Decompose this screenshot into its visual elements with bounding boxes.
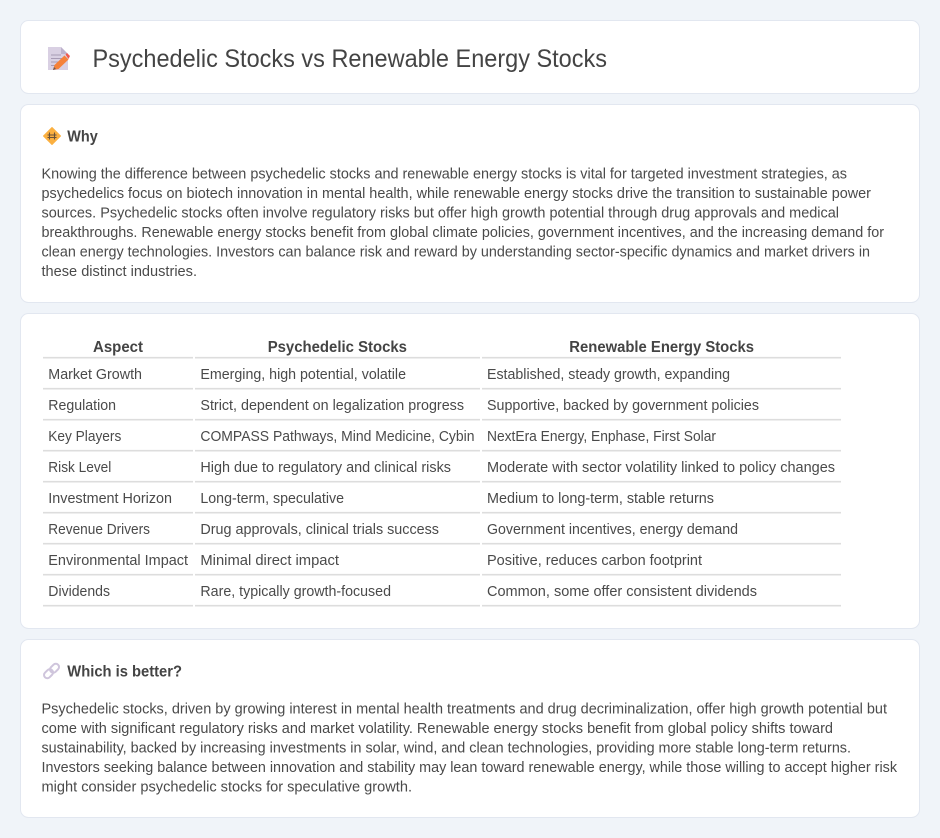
table header row: Aspect (93, 339, 144, 356)
table row: environmental impact: Minimal direct impact (200, 553, 339, 569)
text block: which is better paragraph: come with significant regulatory risks and market volatility. Renewable energy stocks benefit from global policy shifts toward (42, 721, 833, 737)
panel: which is better (20, 640, 920, 818)
text block: why paragraph: psychedelics focus on biotech innovation in mental health, while renewable energy stocks drive the transition to sustainable power (42, 186, 871, 202)
table row: market growth (43, 367, 841, 389)
icon: diamond sign (44, 128, 60, 144)
text block: which is better paragraph: might consider psychedelic stocks for speculative growth. (42, 780, 412, 796)
table row: key players: COMPASS Pathways, Mind Medicine, Cybin (200, 429, 474, 445)
text block: which is better paragraph: sustainability, backed by increasing investments in solar, wind, and clean technologies, providing more stable long-term returns. (42, 740, 851, 756)
text block: which is better paragraph (42, 702, 898, 796)
heading: why: Why (67, 129, 98, 146)
table row: investment horizon: Investment Horizon (48, 491, 172, 507)
table row: dividends: Rare, typically growth-focused (200, 584, 391, 600)
text block: why paragraph: these distinct industries. (42, 264, 197, 280)
table header row (43, 339, 841, 358)
table row: investment horizon: Medium to long-term, stable returns (487, 491, 714, 507)
table row: risk level: Risk Level (48, 460, 111, 476)
table row: dividends: Common, some offer consistent dividends (487, 584, 757, 600)
table row: investment horizon: Long-term, speculative (200, 491, 344, 507)
panel: why (20, 104, 920, 302)
table row: environmental impact (43, 553, 841, 575)
title: Psychedelic Stocks vs Renewable Energy Stocks (92, 45, 607, 73)
text block: why paragraph: breakthroughs. Renewable energy stocks benefit from global climate policies, government incentives, and the increasing demand for (42, 225, 884, 241)
table row: revenue drivers: Government incentives, energy demand (487, 522, 738, 538)
icon: document with pencil (48, 47, 70, 70)
table header row: Renewable Energy Stocks (569, 339, 754, 356)
table row: regulation: Supportive, backed by government policies (487, 398, 759, 414)
table row: dividends: Dividends (48, 584, 110, 600)
table row: revenue drivers: Drug approvals, clinical trials success (200, 522, 439, 538)
table row: regulation: Strict, dependent on legalization progress (200, 398, 464, 414)
table row: market growth: Market Growth (48, 367, 142, 383)
panel: comparison table (20, 314, 920, 628)
text block: why paragraph: Knowing the difference between psychedelic stocks and renewable energy stocks is vital for targeted investment strategies, as (42, 166, 847, 182)
heading: which is better: Which is better? (67, 664, 182, 681)
table row: environmental impact: Environmental Impact (48, 553, 188, 569)
table row: market growth: Emerging, high potential, volatile (200, 367, 406, 383)
table row: investment horizon (43, 491, 841, 513)
table row: key players: Key Players (48, 429, 121, 445)
text block: which is better paragraph: Investors seeking balance between innovation and stability may lean toward renewable energy, while those willing to accept higher risk (42, 760, 898, 776)
table header row: Psychedelic Stocks (268, 339, 407, 356)
table row: risk level (43, 460, 841, 482)
table row: market growth: Established, steady growth, expanding (487, 367, 730, 383)
text block: why paragraph (42, 166, 884, 280)
table row: revenue drivers: Revenue Drivers (48, 522, 150, 538)
table row: revenue drivers (43, 522, 841, 544)
table row: risk level: Moderate with sector volatility linked to policy changes (487, 460, 835, 476)
table row: regulation (43, 398, 841, 420)
icon: chain link (43, 662, 60, 680)
table row: key players (43, 429, 841, 451)
table row: dividends (43, 584, 841, 606)
table row: risk level: High due to regulatory and clinical risks (200, 460, 451, 476)
table row: key players: NextEra Energy, Enphase, First Solar (487, 429, 716, 445)
table row: regulation: Regulation (48, 398, 116, 414)
text block: why paragraph: sources. Psychedelic stocks often involve regulatory risks but offer high growth potential through drug approvals and medical (42, 206, 839, 222)
text block: why paragraph: clean energy technologies. Investors can balance risk and reward by understanding sector-specific dynamics and market drivers in (42, 244, 870, 260)
text block: which is better paragraph: Psychedelic stocks, driven by growing interest in mental health treatments and drug decriminalization, offer high growth potential but (42, 702, 887, 718)
table row: environmental impact: Positive, reduces carbon footprint (487, 553, 702, 569)
panel: title header (20, 20, 920, 94)
